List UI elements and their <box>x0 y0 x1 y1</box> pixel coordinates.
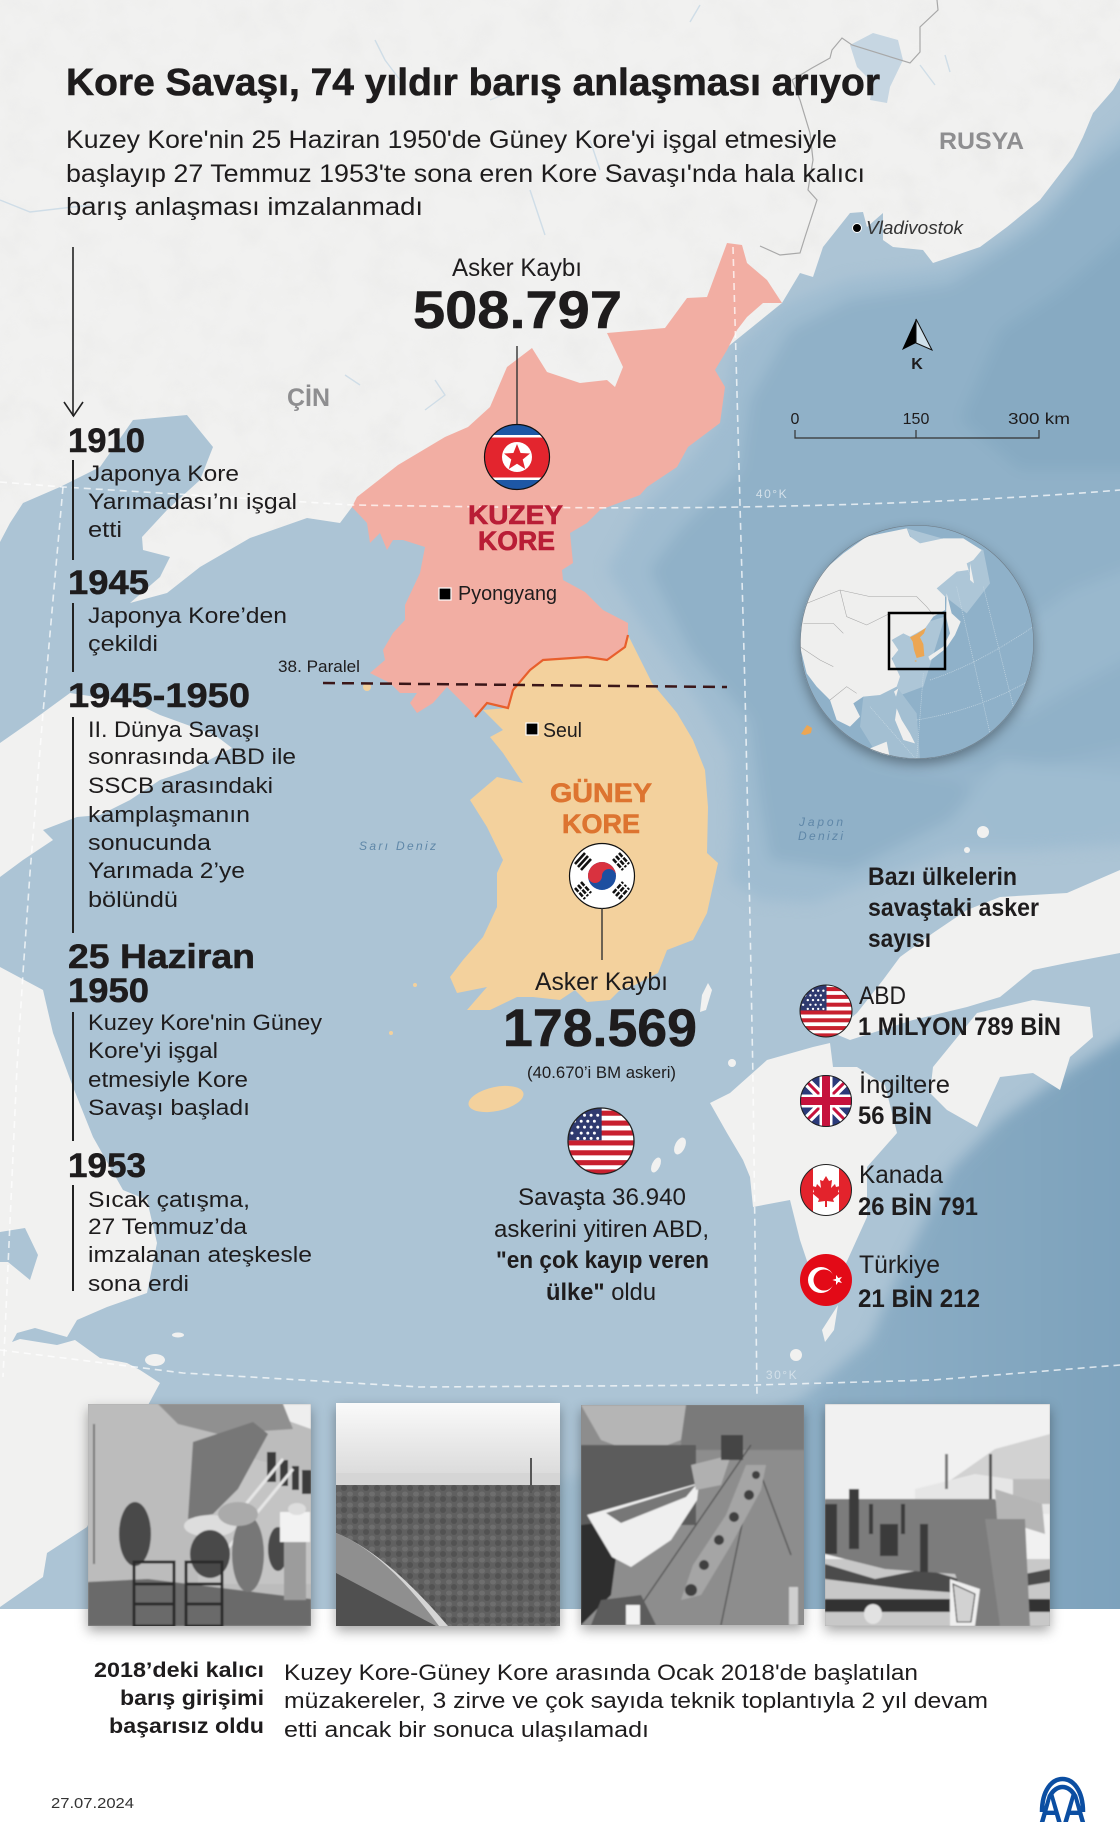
timeline: 25 Haziran 1950 <box>68 938 322 1141</box>
timeline: 1910: Japonya Kore <box>88 461 239 486</box>
icon: South Korea flag <box>570 844 634 908</box>
timeline: 1945 <box>68 564 287 672</box>
latitude label 40: 40°K <box>756 487 788 501</box>
footer text: etti ancak bir sonuca ulaşılamadı <box>284 1717 649 1742</box>
north casualties number: 508.797 <box>413 281 622 340</box>
timeline: 1945-1950: 1945-1950 <box>68 677 250 715</box>
photo 1 <box>88 1404 311 1626</box>
timeline: 25 Haziran 1950: 25 Haziran <box>68 938 255 976</box>
footer heading: barış girişimi <box>120 1687 264 1710</box>
land: Honshu <box>833 870 1120 1040</box>
map: North Korea <box>352 243 782 717</box>
map: DMZ border <box>475 635 628 717</box>
timeline: 1953: 27 Temmuz’da <box>88 1214 248 1239</box>
timeline: 1953: Sıcak çatışma, <box>88 1187 250 1212</box>
label: South Korea: GÜNEY <box>550 778 652 808</box>
footer text <box>284 1660 988 1742</box>
timeline: 1945-1950: SSCB arasındaki <box>88 773 273 798</box>
label: China: ÇİN <box>287 384 330 412</box>
US casualties text: "en çok kayıp veren <box>496 1247 709 1274</box>
row: Turkey: Türkiye <box>859 1251 940 1279</box>
timeline: 1945-1950 <box>68 677 296 933</box>
panel heading: troop numbers: sayısı <box>868 925 931 953</box>
timeline: 25 Haziran 1950: Savaşı başladı <box>88 1095 250 1120</box>
row: USA: ABD <box>859 982 906 1010</box>
timeline: 25 Haziran 1950: etmesiyle Kore <box>88 1067 248 1092</box>
label: Sea of Japan: Denizi <box>798 829 843 843</box>
row: Turkey: 21 BİN 212 <box>858 1285 980 1313</box>
photo 3 <box>581 1405 804 1625</box>
timeline: 1945-1950: Yarımada 2’ye <box>88 858 245 883</box>
timeline: 1910: etti <box>88 517 122 542</box>
label: Seoul <box>526 720 582 742</box>
timeline: 1945-1950: bölündü <box>88 887 178 912</box>
photo 4 <box>825 1404 1050 1626</box>
timeline: 1945-1950: sonrasında ABD ile <box>88 744 296 769</box>
intro paragraph: başlayıp 27 Temmuz 1953'te sona eren Kore Savaşı'nda hala kalıcı <box>66 160 865 188</box>
map: Jeju island <box>466 1081 526 1117</box>
label: Russia: RUSYA <box>939 128 1024 155</box>
footer heading: 2018’deki kalıcı <box>94 1659 264 1682</box>
row: UK: 56 BİN <box>858 1102 932 1130</box>
timeline: 1953: 1953 <box>68 1147 146 1185</box>
timeline: 1953: sona erdi <box>88 1271 189 1296</box>
intro paragraph <box>66 126 865 221</box>
graticule <box>0 247 1120 1395</box>
timeline: 1945: Japonya Kore’den <box>88 603 287 628</box>
footer heading: başarısız oldu <box>109 1715 264 1738</box>
south casualties number: 178.569 <box>503 999 697 1058</box>
US casualties text: Savaşta 36.940 <box>518 1184 686 1211</box>
timeline: 1945-1950: II. Dünya Savaşı <box>88 717 260 742</box>
timeline arrow <box>64 247 83 416</box>
timeline: 1953 <box>68 1147 312 1296</box>
timeline: 25 Haziran 1950: 1950 <box>68 972 149 1010</box>
timeline: 1945-1950: sonucunda <box>88 830 212 855</box>
timeline: 1910: Yarımadası’nı işgal <box>88 489 297 514</box>
timeline: 1953: imzalanan ateşkesle <box>88 1242 312 1267</box>
38th parallel dashed line <box>323 683 727 687</box>
footer text: müzakereler, 3 zirve ve çok sayıda teknik toplantıyla 2 yıl devam <box>284 1688 988 1713</box>
timeline: 1945: çekildi <box>88 631 158 656</box>
timeline: 1945: 1945 <box>68 564 149 602</box>
row: USA: 1 MİLYON 789 BİN <box>858 1013 1061 1041</box>
footer text: Kuzey Kore-Güney Kore arasında Ocak 2018'de başlatılan <box>284 1660 918 1685</box>
label: Sea of Japan: Japon <box>798 815 843 829</box>
map: South Korea <box>450 635 718 1010</box>
row: UK <box>800 1070 950 1130</box>
north arrow: K <box>911 356 923 373</box>
land: Shandong <box>0 693 232 877</box>
scale bar: 0 <box>791 411 800 428</box>
country borders <box>760 0 938 255</box>
row: UK: İngiltere <box>859 1070 950 1099</box>
UN soldiers note: (40.670’i BM askeri) <box>527 1063 676 1082</box>
rivers and lakes <box>0 5 950 410</box>
photo 2 <box>336 1403 560 1626</box>
timeline: 1910: 1910 <box>68 422 145 460</box>
intro paragraph: Kuzey Kore'nin 25 Haziran 1950'de Güney Kore'yi işgal etmesiyle <box>66 126 837 154</box>
logo: AA: AA <box>1039 1787 1086 1831</box>
icon: North Korea flag <box>484 424 550 490</box>
row: USA <box>800 982 1061 1041</box>
label: South Korea: KORE <box>562 809 640 839</box>
label: Sea of Japan <box>798 815 843 843</box>
US casualties text: askerini yitiren ABD, <box>494 1216 709 1243</box>
US casualties text <box>494 1184 709 1306</box>
label: Vladivostok: Vladivostok <box>866 218 964 238</box>
date: 27.07.2024 <box>51 1795 134 1812</box>
intro paragraph: barış anlaşması imzalanmadı <box>66 193 423 221</box>
panel heading: troop numbers <box>868 863 1039 953</box>
panel heading: troop numbers: Bazı ülkelerin <box>868 863 1017 891</box>
latitude label 30: 30°K <box>766 1368 798 1382</box>
land: Shikoku <box>930 1000 1093 1127</box>
north arrow <box>902 319 932 373</box>
icon: US flag large <box>568 1108 634 1175</box>
row: Turkey <box>800 1251 980 1313</box>
scale bar: 150 <box>903 411 929 428</box>
label: Pyongyang: Pyongyang <box>458 583 557 605</box>
label: Seoul: Seul <box>543 720 582 742</box>
land: China and Russia <box>0 0 1120 603</box>
label: Yellow Sea: Sarı Deniz <box>359 839 436 853</box>
timeline: 1945-1950: kamplaşmanın <box>88 802 250 827</box>
label: South Korea <box>550 778 652 839</box>
leader line south <box>601 908 603 960</box>
label: 38th parallel: 38. Paralel <box>278 657 360 676</box>
timeline: 1910 <box>68 422 297 560</box>
lake Khanka <box>850 33 903 103</box>
scale bar: 300 km <box>1008 411 1070 428</box>
land: eastern China coast <box>0 967 160 1607</box>
row: Canada: 26 BİN 791 <box>858 1193 978 1221</box>
timeline: 25 Haziran 1950: Kuzey Kore'nin Güney <box>88 1010 322 1035</box>
row: Canada: Kanada <box>859 1161 943 1189</box>
footer heading <box>94 1659 264 1738</box>
label: North Korea: KORE <box>478 526 555 556</box>
islands <box>145 826 989 1366</box>
south casualties label: Asker Kaybı <box>535 968 668 996</box>
land: Kyushu <box>710 1043 897 1285</box>
panel heading: troop numbers: savaştaki asker <box>868 894 1039 922</box>
US casualties text: ülke" oldu <box>546 1279 656 1306</box>
label: North Korea <box>468 500 563 556</box>
timeline: 25 Haziran 1950: Kore'yi işgal <box>88 1038 218 1063</box>
title: Kore Savaşı, 74 yıldır barış anlaşması arıyor <box>66 62 880 104</box>
label: North Korea: KUZEY <box>468 500 563 530</box>
locator globe <box>800 525 1034 760</box>
row: Canada <box>800 1164 978 1216</box>
leader line north <box>516 346 518 430</box>
north casualties label: Asker Kaybı <box>452 254 582 282</box>
scale bar <box>791 411 1070 438</box>
